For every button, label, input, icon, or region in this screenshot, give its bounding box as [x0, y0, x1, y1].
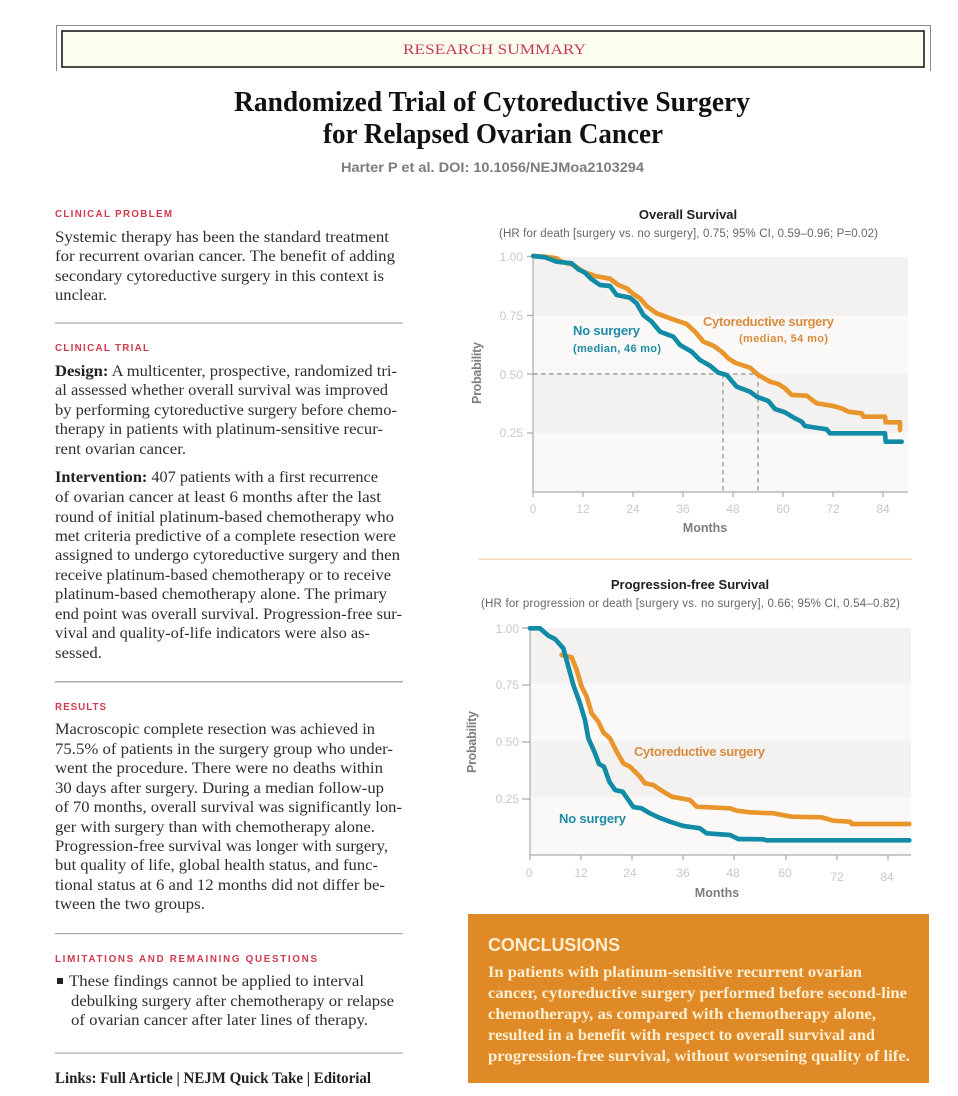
- chart: progression-free survival: 1.00: [496, 622, 519, 636]
- header banner: RESEARCH SUMMARY: [403, 42, 586, 58]
- panel: conclusions: chemotherapy, as compared with chemotherapy alone,: [488, 1006, 876, 1023]
- chart: progression-free survival: 0.75: [496, 678, 519, 692]
- chart: progression-free survival: Progression-free Survival: [611, 577, 769, 592]
- panel: conclusions: progression-free survival, without worsening quality of life.: [488, 1048, 910, 1065]
- chart: overall survival: 1.00: [500, 250, 523, 264]
- panel: limitations and remaining questions: [55, 954, 394, 1029]
- panel: limitations and remaining questions: These findings cannot be applied to interval: [69, 973, 365, 990]
- chart: overall survival: 0.75: [500, 309, 523, 323]
- panel: clinical trial: sessed.: [55, 645, 102, 662]
- chart: overall survival: 0.25: [500, 426, 523, 440]
- panel: results: but quality of life, global health status, and func-: [55, 857, 378, 874]
- chart: progression-free survival: [465, 577, 911, 900]
- panel: clinical trial: met criteria predictive of a complete resection were: [55, 528, 396, 545]
- chart: progression-free survival: 0.25: [496, 792, 519, 806]
- panel: clinical trial: receive platinum-based chemotherapy or to receive: [55, 567, 391, 584]
- panel: clinical trial: Design: A multicenter, prospective, randomized tri-: [55, 363, 397, 380]
- panel: clinical trial: rent ovarian cancer.: [55, 441, 186, 458]
- chart: progression-free survival: 60: [778, 866, 792, 880]
- panel: results: [55, 702, 402, 913]
- panel: limitations and remaining questions: LIMITATIONS AND REMAINING QUESTIONS: [55, 954, 317, 965]
- chart: overall survival: (median, 54 mo): [739, 333, 828, 345]
- links: Links: Full Article | NEJM Quick Take | Editorial: [55, 1070, 372, 1087]
- chart: overall survival: Overall Survival: [639, 207, 737, 222]
- panel: clinical problem: unclear.: [55, 287, 107, 304]
- header banner: [56, 26, 930, 71]
- panel: results: RESULTS: [55, 702, 106, 713]
- panel: limitations and remaining questions: of ovarian cancer after later lines of therapy.: [71, 1012, 368, 1029]
- panel: conclusions: cancer, cytoreductive surgery performed before second-line: [488, 985, 907, 1002]
- panel: clinical trial: [55, 343, 402, 662]
- panel: clinical trial: platinum-based chemotherapy alone. The primary: [55, 586, 387, 603]
- chart: overall survival: Probability: [470, 342, 484, 404]
- chart: overall survival: 36: [676, 502, 690, 516]
- chart: progression-free survival: 72: [830, 870, 844, 884]
- chart: progression-free survival: 0: [526, 866, 533, 880]
- chart: overall survival: Months: [683, 521, 727, 535]
- chart: progression-free survival: Cytoreductive surgery: [634, 744, 766, 759]
- chart: progression-free survival: 12: [574, 866, 588, 880]
- chart: overall survival: (HR for death [surgery vs. no surgery], 0.75; 95% CI, 0.59–0.96; P=0.02): [499, 228, 878, 240]
- panel: conclusions: CONCLUSIONS: [488, 935, 620, 955]
- panel: clinical problem: CLINICAL PROBLEM: [55, 209, 172, 220]
- chart: overall survival: 84: [876, 502, 890, 516]
- panel: results: 30 days after surgery. During a median follow-up: [55, 780, 384, 797]
- panel: results: of 70 months, overall survival was significantly lon-: [55, 799, 402, 816]
- panel: clinical trial: al assessed whether overall survival was improved: [55, 382, 388, 399]
- panel: conclusions: [468, 914, 929, 1083]
- citation: Harter P et al. DOI: 10.1056/NEJMoa2103294: [341, 160, 645, 175]
- panel: clinical trial: CLINICAL TRIAL: [55, 343, 149, 354]
- chart: progression-free survival: 36: [676, 866, 690, 880]
- title: [234, 87, 750, 150]
- panel: clinical problem: [55, 209, 395, 304]
- panel: results: tween the two groups.: [55, 896, 205, 913]
- chart: overall survival: 0: [530, 502, 537, 516]
- panel: clinical problem: Systemic therapy has been the standard treatment: [55, 229, 390, 246]
- chart: overall survival: 60: [776, 502, 790, 516]
- panel: results: Macroscopic complete resection was achieved in: [55, 721, 375, 738]
- title: for Relapsed Ovarian Cancer: [323, 119, 663, 150]
- panel: clinical problem: secondary cytoreductive surgery in this context is: [55, 268, 384, 285]
- title: Randomized Trial of Cytoreductive Surgery: [234, 87, 750, 118]
- panel: clinical trial: assigned to undergo cytoreductive surgery and then: [55, 547, 400, 564]
- chart: overall survival: Cytoreductive surgery: [703, 314, 835, 329]
- chart: progression-free survival: Probability: [465, 711, 479, 773]
- panel: clinical trial: by performing cytoreductive surgery before chemo-: [55, 402, 397, 419]
- chart: overall survival: 72: [826, 502, 840, 516]
- chart: progression-free survival: 48: [726, 866, 740, 880]
- panel: clinical problem: for recurrent ovarian cancer. The benefit of adding: [55, 248, 395, 265]
- chart: progression-free survival: 84: [880, 870, 894, 884]
- chart: overall survival: 12: [576, 502, 590, 516]
- panel: clinical trial: of ovarian cancer at least 6 months after the last: [55, 489, 382, 506]
- panel: results: Progression-free survival was longer with surgery,: [55, 838, 388, 855]
- chart: overall survival: 48: [726, 502, 740, 516]
- panel: conclusions: In patients with platinum-sensitive recurrent ovarian: [488, 964, 862, 981]
- chart: progression-free survival: No surgery: [559, 811, 627, 826]
- chart: progression-free survival: 24: [623, 866, 637, 880]
- panel: clinical trial: end point was overall survival. Progression-free sur-: [55, 606, 402, 623]
- chart: overall survival: (median, 46 mo): [573, 343, 661, 355]
- chart: progression-free survival: 0.50: [496, 735, 519, 749]
- panel: clinical trial: round of initial platinum-based chemotherapy who: [55, 509, 394, 526]
- panel: conclusions: resulted in a benefit with respect to overall survival and: [488, 1027, 875, 1044]
- panel: limitations and remaining questions: debulking surgery after chemotherapy or relapse: [71, 993, 394, 1010]
- chart: overall survival: No surgery: [573, 323, 641, 338]
- panel: results: 75.5% of patients in the surgery group who under-: [55, 741, 393, 758]
- panel: clinical trial: Intervention: 407 patients with a first recurrence: [55, 469, 378, 486]
- chart: overall survival: 0.50: [500, 368, 523, 382]
- chart: progression-free survival: (HR for progression or death [surgery vs. no surgery], 0.66; 95% CI, 0.54–0.82): [481, 598, 900, 610]
- panel: results: went the procedure. There were no deaths within: [55, 760, 383, 777]
- chart: progression-free survival: Months: [695, 886, 739, 900]
- chart: overall survival: [470, 207, 908, 535]
- panel: results: tional status at 6 and 12 months did not differ be-: [55, 877, 385, 894]
- panel: clinical trial: vival and quality-of-life indicators were also as-: [55, 625, 370, 642]
- panel: results: ger with surgery than with chemotherapy alone.: [55, 819, 375, 836]
- panel: clinical trial: therapy in patients with platinum-sensitive recur-: [55, 421, 383, 438]
- chart: overall survival: 24: [626, 502, 640, 516]
